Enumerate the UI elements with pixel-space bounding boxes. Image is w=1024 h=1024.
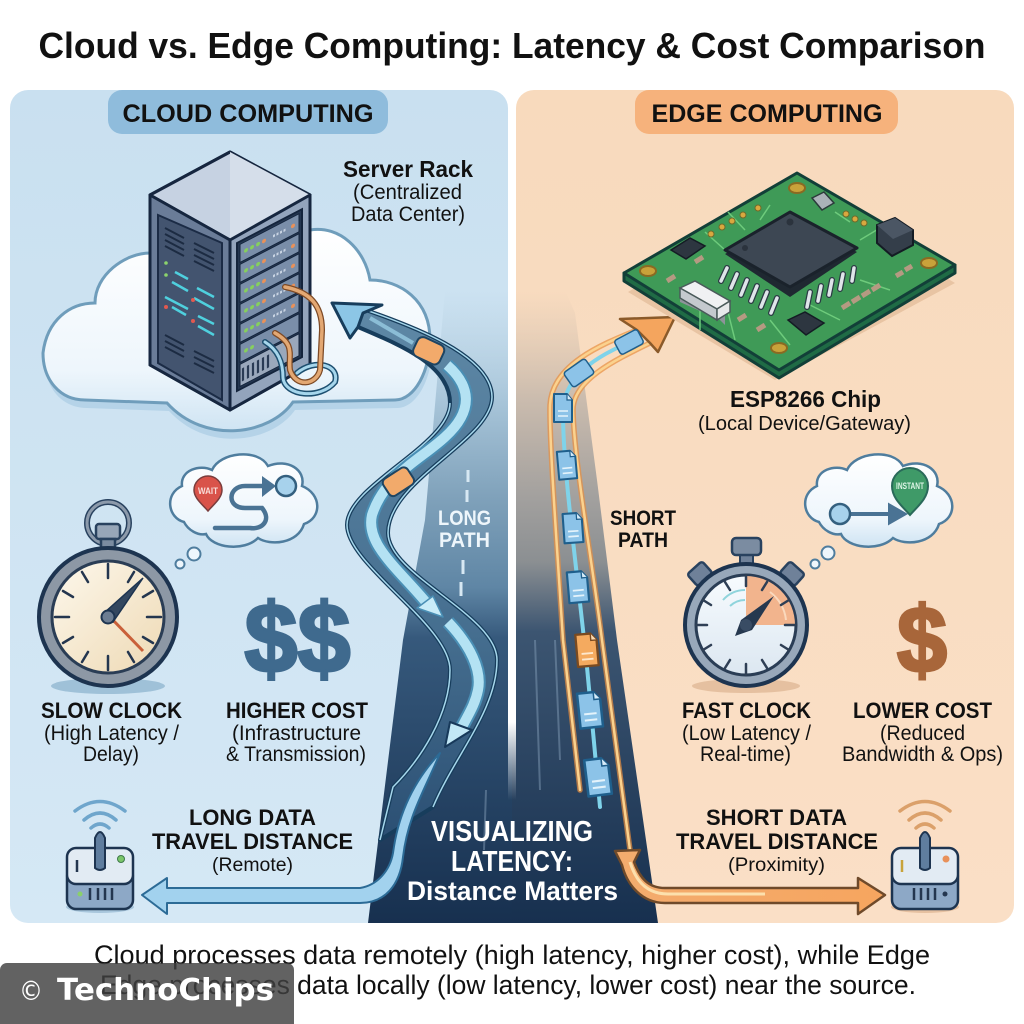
big cloud: [43, 229, 432, 439]
label: slow clock: [41, 698, 182, 766]
start dot: [830, 504, 850, 524]
cloud bubbles: [810, 546, 834, 568]
watermark: [0, 963, 294, 1024]
label: short data travel distance: (Proximity): [728, 855, 825, 876]
icon: single dollar: $: [897, 587, 947, 692]
short path: [550, 317, 675, 850]
label: long data travel distance: LONG DATA: [189, 805, 316, 830]
label: esp8266 chip: (Local Device/Gateway): [698, 413, 911, 435]
cloud bubbles: [176, 548, 200, 568]
label: fast clock: FAST CLOCK: [682, 698, 811, 723]
label: slow clock: Delay): [83, 743, 139, 766]
white connector: [680, 281, 730, 325]
label: long path: [438, 507, 491, 552]
small ic blocks: [671, 192, 913, 335]
arrow head: lower road down: [445, 722, 472, 747]
label: short path: SHORT: [610, 507, 676, 530]
thought cloud: long route: [170, 454, 317, 568]
central road: [368, 280, 658, 923]
icon: right router: [891, 802, 959, 913]
center caption: visualizing latency: VISUALIZING: [431, 816, 593, 848]
arrow head: to chip: [620, 317, 675, 352]
label: long path: LONG: [438, 507, 491, 530]
green pin: INSTANT: [896, 481, 924, 491]
heading: edge computing: [635, 90, 898, 134]
gold vias: [708, 205, 867, 237]
label: slow clock: (High Latency /: [44, 722, 179, 745]
label: long data travel distance: (Remote): [212, 855, 293, 876]
long path road with arrow: [332, 303, 497, 840]
label: fast clock: (Low Latency /: [682, 722, 811, 745]
watermark: ©: [19, 976, 43, 1007]
route squiggle: [215, 486, 266, 528]
footer caption: [94, 940, 930, 1000]
footer caption: Cloud processes data remotely (high latency, higher cost), while Edge: [94, 940, 930, 970]
icon: esp8266 chip board: [624, 173, 955, 380]
heading: cloud computing: [108, 90, 388, 134]
server left face panel: [158, 215, 222, 400]
short path rails: [550, 330, 650, 850]
label: short data travel distance: SHORT DATA: [706, 805, 847, 830]
label: higher cost: & Transmission): [226, 743, 366, 766]
arrow head: to server: [332, 303, 382, 338]
center caption: visualizing latency: [407, 816, 618, 906]
speed wedge: [746, 576, 795, 625]
label: higher cost: (Infrastructure: [232, 722, 361, 745]
server cables: [265, 287, 336, 394]
label: long data travel distance: [152, 805, 353, 876]
chip pins: [721, 268, 854, 313]
label: server rack: [343, 156, 473, 226]
heading: edge computing: EDGE COMPUTING: [652, 100, 882, 128]
label: esp8266 chip: [698, 386, 911, 435]
footer caption: Edge processes data locally (low latency, lower cost) near the source.: [100, 970, 916, 1000]
icon: double dollar: $$: [244, 583, 350, 693]
panel: cloud computing: [10, 90, 508, 923]
label: higher cost: [226, 698, 369, 766]
direct arrow: [850, 506, 904, 522]
mounting holes: [640, 183, 937, 353]
data packet: [381, 465, 416, 498]
panel: edge computing: [516, 90, 1014, 923]
watermark: TechnoChips: [57, 973, 274, 1008]
red pin: WAIT: [198, 486, 218, 496]
title: Cloud vs. Edge Computing: Latency & Cost Comparison: [38, 25, 986, 66]
icon: slow clock: [39, 502, 177, 694]
center caption: visualizing latency: Distance Matters: [407, 876, 618, 906]
icon: left router: [66, 802, 134, 913]
icon: server rack: [150, 152, 336, 410]
label: lower cost: [842, 698, 1003, 766]
resistors: [667, 257, 912, 330]
label: higher cost: HIGHER COST: [226, 698, 369, 723]
label: short path: PATH: [618, 529, 668, 552]
label: fast clock: Real-time): [700, 743, 791, 766]
label: slow clock: SLOW CLOCK: [41, 698, 182, 723]
heading: cloud computing: CLOUD COMPUTING: [122, 100, 374, 128]
label: short data travel distance: [676, 805, 878, 876]
short arrow to router: [615, 850, 885, 914]
label: lower cost: LOWER COST: [853, 698, 993, 723]
label: fast clock: [682, 698, 811, 766]
red pin: [194, 476, 222, 511]
label: short data travel distance: TRAVEL DISTANCE: [676, 829, 878, 854]
arrow head: mid road down: [417, 596, 443, 617]
label: esp8266 chip: ESP8266 Chip: [730, 386, 881, 412]
route arrow head: [262, 476, 276, 497]
label: lower cost: (Reduced: [880, 722, 965, 745]
label: short path: [610, 507, 676, 552]
label: long path: PATH: [439, 529, 490, 552]
long arrow to router: [142, 753, 440, 914]
thought cloud: instant route: [805, 454, 952, 568]
data packet: [411, 335, 446, 366]
label: server rack: Server Rack: [343, 156, 473, 182]
server right face panel: [237, 209, 302, 391]
route end dot: [276, 476, 296, 496]
label: long data travel distance: TRAVEL DISTANCE: [152, 829, 353, 854]
board traces: [700, 205, 890, 345]
long path road body: [347, 308, 497, 840]
label: lower cost: Bandwidth & Ops): [842, 743, 1003, 766]
label: server rack: (Centralized: [353, 181, 462, 204]
icon: fast clock: [685, 538, 807, 693]
label: server rack: Data Center): [351, 203, 465, 226]
green pin: [892, 468, 928, 515]
center caption: visualizing latency: LATENCY:: [451, 846, 573, 878]
data documents: [554, 329, 644, 796]
main chip: [725, 212, 857, 297]
